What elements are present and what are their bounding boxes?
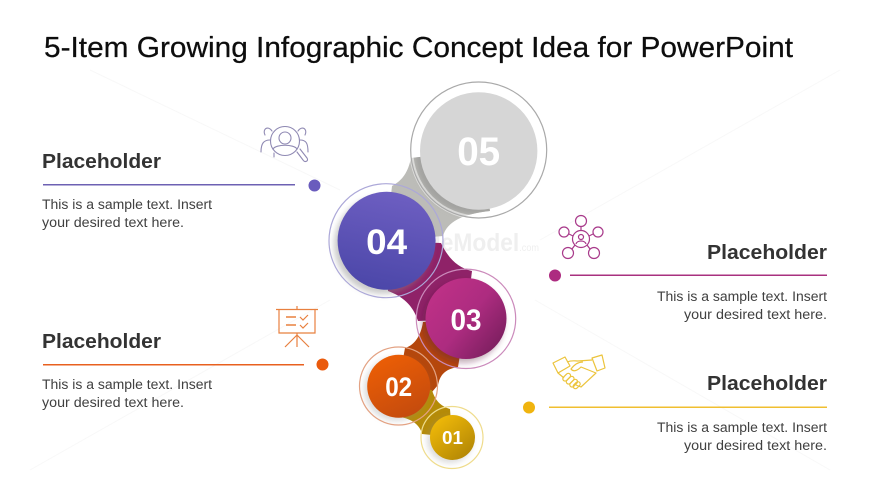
body text: item 02: This is a sample text. Insert (42, 377, 212, 392)
body text: item 04: This is a sample text. Insert (42, 197, 212, 212)
connector 05 to 04 (386, 150, 490, 241)
circle 04: 04 (366, 223, 408, 262)
circle 05: 05 (457, 130, 500, 174)
circle 02: 02 (385, 372, 412, 402)
leader line and dot: item 01 (523, 402, 827, 414)
body text: item 03: your desired text here. (684, 307, 827, 322)
circle 01 (421, 406, 483, 468)
title: 5-Item Growing Infographic Concept Idea for PowerPoint (44, 32, 793, 64)
panel: item 02 text (42, 330, 328, 410)
circle 04 (329, 184, 443, 298)
icon: presentation board (276, 306, 318, 347)
circle 03: 03 (450, 304, 482, 337)
panel: item 01 text (523, 372, 827, 453)
connector 03 to 02 (398, 319, 466, 392)
leader line and dot: item 04 (43, 180, 320, 192)
body text: item 03 (657, 289, 827, 322)
chart: growing chain of five numbered circles (329, 82, 547, 468)
faint background lines (30, 70, 840, 470)
circle 01: 01 (442, 428, 463, 448)
body text: item 02: your desired text here. (42, 395, 184, 410)
heading: item 02: Placeholder (42, 330, 161, 353)
body text: item 01 (657, 420, 827, 453)
icon: people search (261, 126, 308, 161)
watermark: SlideModel.com (399, 229, 539, 257)
body text: item 04: your desired text here. (42, 215, 184, 230)
heading: item 03: Placeholder (707, 241, 827, 264)
body text: item 01: This is a sample text. Insert (657, 420, 827, 435)
connector 04 to 03 (386, 241, 472, 321)
connector shadow 05 (414, 157, 490, 215)
body text: item 03: This is a sample text. Insert (657, 289, 827, 304)
icon: network (559, 216, 603, 258)
panel: item 04 text (42, 150, 320, 230)
leader line and dot: item 02 (43, 358, 328, 370)
body text: item 01: your desired text here. (684, 438, 827, 453)
connector 02 to 01 (398, 386, 452, 437)
icon: handshake (553, 355, 605, 390)
leader line and dot: item 03 (549, 270, 827, 282)
circle 05 (411, 82, 547, 218)
body text: item 02 (42, 377, 212, 410)
heading: item 01: Placeholder (707, 372, 827, 395)
heading: item 04: Placeholder (42, 150, 161, 173)
body text: item 04 (42, 197, 212, 230)
circle 03 (416, 269, 516, 368)
panel: item 03 text (549, 241, 827, 322)
circle 02 (360, 347, 438, 425)
